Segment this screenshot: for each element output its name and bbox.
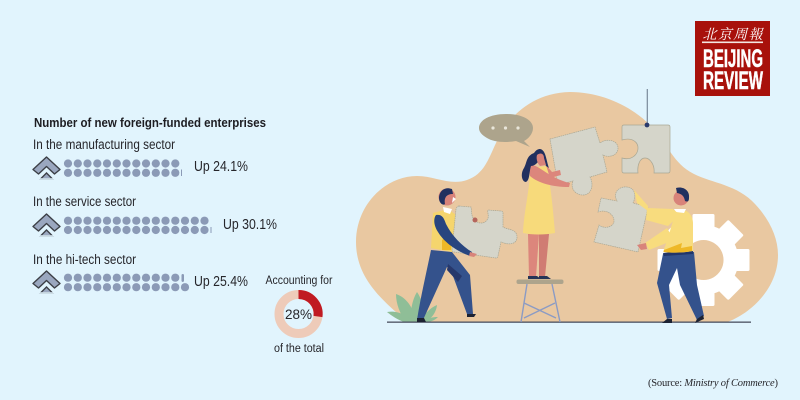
figure: woman in yellow dress [522, 149, 570, 279]
ground line [387, 322, 751, 323]
logo: Beijing Review: 北京周報 [702, 24, 764, 44]
figure: man on right [634, 188, 704, 323]
puzzle piece: held by man on right [594, 187, 648, 252]
title: Number of new foreign-funded enterprises [34, 115, 266, 130]
puzzle piece: hanging [622, 89, 670, 173]
row: manufacturing sector: In the manufacturing sector [33, 137, 175, 152]
row: service sector: In the service sector [33, 194, 136, 209]
row: hi-tech sector [33, 252, 248, 293]
puzzle piece: held by man on left [452, 206, 517, 258]
figure: man on left [417, 188, 517, 322]
row: service sector [33, 194, 277, 236]
logo: Beijing Review: REVIEW [703, 67, 763, 95]
row: hi-tech sector: In the hi-tech sector [33, 252, 136, 267]
icon: white gear [658, 214, 750, 306]
donut callout: 28% of the total: Accounting for [266, 275, 333, 287]
row: manufacturing sector: Up 24.1% [194, 159, 248, 175]
donut callout: 28% of the total [266, 275, 333, 355]
row: hi-tech sector: Up 25.4% [194, 274, 248, 290]
logo: Beijing Review [695, 21, 770, 96]
puzzle piece: held high by woman [550, 127, 618, 195]
donut callout: 28% of the total: of the total [274, 343, 324, 355]
icon: plant [387, 292, 438, 322]
speech bubble [479, 114, 533, 147]
donut callout: 28% of the total: 28% [285, 307, 312, 322]
row: manufacturing sector [33, 137, 248, 179]
stool [516, 280, 564, 322]
source note: (Source: Ministry of Commerce) [648, 378, 778, 389]
illustration: background blob [356, 92, 778, 322]
row: service sector: Up 30.1% [223, 217, 277, 233]
